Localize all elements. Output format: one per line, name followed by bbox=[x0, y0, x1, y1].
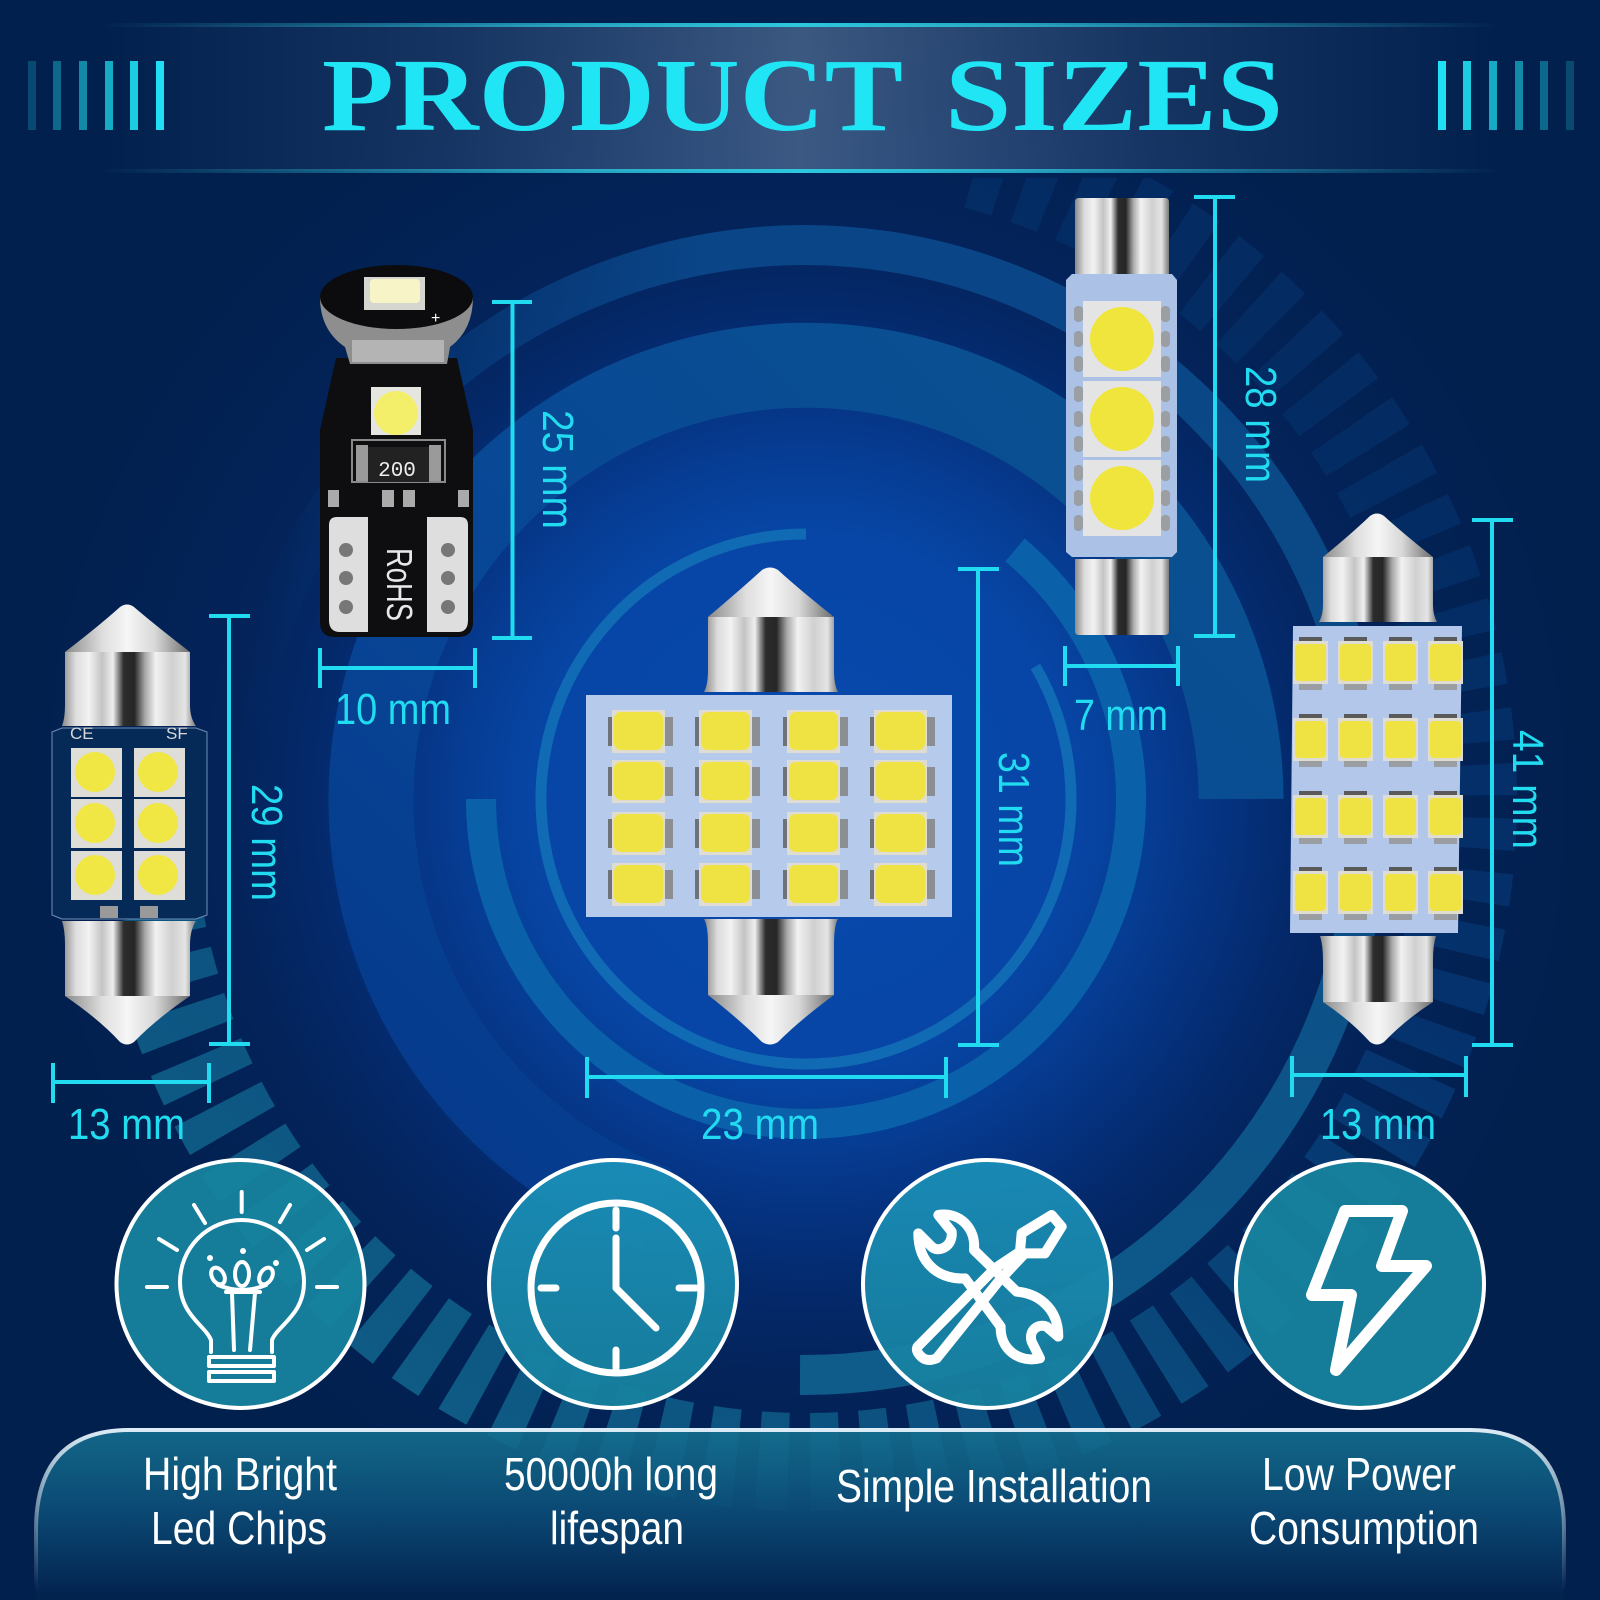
title: PRODUCT bbox=[322, 38, 903, 153]
dimension: 25 mm bbox=[492, 302, 582, 638]
caption: 50000h long lifespan: lifespan bbox=[550, 1502, 684, 1554]
icon: wrench and screwdriver bbox=[863, 1160, 1111, 1408]
caption: high bright led chips bbox=[143, 1448, 337, 1554]
dimension: 41 mm bbox=[1472, 520, 1552, 1045]
icon: lightning bolt bbox=[1236, 1160, 1484, 1408]
dimension: 7 mm: 7 mm bbox=[1074, 691, 1168, 740]
icon: clock bbox=[489, 1160, 737, 1408]
dimension: 29 mm: 29 mm bbox=[242, 784, 291, 901]
caption: 50000h long lifespan bbox=[504, 1448, 718, 1554]
dimension: 13 mm right bbox=[1292, 1056, 1466, 1149]
dimension: 41 mm: 41 mm bbox=[1503, 730, 1552, 849]
panel: feature captions bbox=[36, 1430, 1564, 1600]
bulb: top-right festoon with three round chips bbox=[1066, 198, 1177, 635]
caption: low power consumption: Low Power bbox=[1262, 1448, 1456, 1500]
left stripes bbox=[28, 61, 164, 130]
dimension: 13 mm right: 13 mm bbox=[1320, 1100, 1436, 1149]
title: SIZES bbox=[945, 38, 1283, 153]
right stripes bbox=[1438, 61, 1574, 130]
dimension: 31 mm: 31 mm bbox=[989, 752, 1038, 867]
caption: simple installation: Simple Installation bbox=[836, 1460, 1152, 1512]
dimension: 25 mm: 25 mm bbox=[533, 410, 582, 529]
dimension: 28 mm bbox=[1194, 197, 1285, 636]
dimension: 29 mm bbox=[209, 616, 291, 1044]
caption: high bright led chips: High Bright bbox=[143, 1448, 337, 1500]
bulb: left festoon with six chips: CE bbox=[70, 724, 94, 743]
bulb: black T10 wedge: RoHS bbox=[379, 548, 420, 621]
header band bbox=[100, 23, 1500, 173]
bulb: black T10 wedge bbox=[320, 265, 473, 637]
caption: 50000h long lifespan: 50000h long bbox=[504, 1448, 718, 1500]
icon: light bulb bbox=[116, 1160, 364, 1408]
dimension: 28 mm: 28 mm bbox=[1236, 366, 1285, 483]
dimension: 13 mm left: 13 mm bbox=[68, 1100, 185, 1149]
caption: high bright led chips: Led Chips bbox=[151, 1502, 327, 1554]
caption: low power consumption: Consumption bbox=[1249, 1502, 1479, 1554]
bulb: left festoon with six chips: SF bbox=[166, 724, 188, 743]
dimension: 7 mm bbox=[1065, 646, 1178, 740]
bulb: left festoon with six chips bbox=[52, 604, 207, 1044]
dimension: 23 mm: 23 mm bbox=[701, 1100, 819, 1149]
dimension: 13 mm left bbox=[53, 1063, 210, 1149]
bulb: black T10 wedge: 200 bbox=[378, 460, 416, 483]
caption: low power consumption bbox=[1249, 1448, 1479, 1554]
title bbox=[322, 38, 1283, 153]
concentric rings and radial ticks bbox=[154, 160, 1468, 1462]
dimension: 10 mm bbox=[320, 648, 475, 734]
dimension: 31 mm bbox=[958, 569, 1038, 1045]
bulb: centre festoon with sixteen chips bbox=[586, 568, 952, 1044]
dimension: 23 mm bbox=[587, 1057, 946, 1149]
dimension: 10 mm: 10 mm bbox=[335, 685, 451, 734]
bulb: black T10 wedge: + bbox=[431, 310, 440, 327]
bulb: right festoon with sixteen chips bbox=[1290, 514, 1463, 1044]
